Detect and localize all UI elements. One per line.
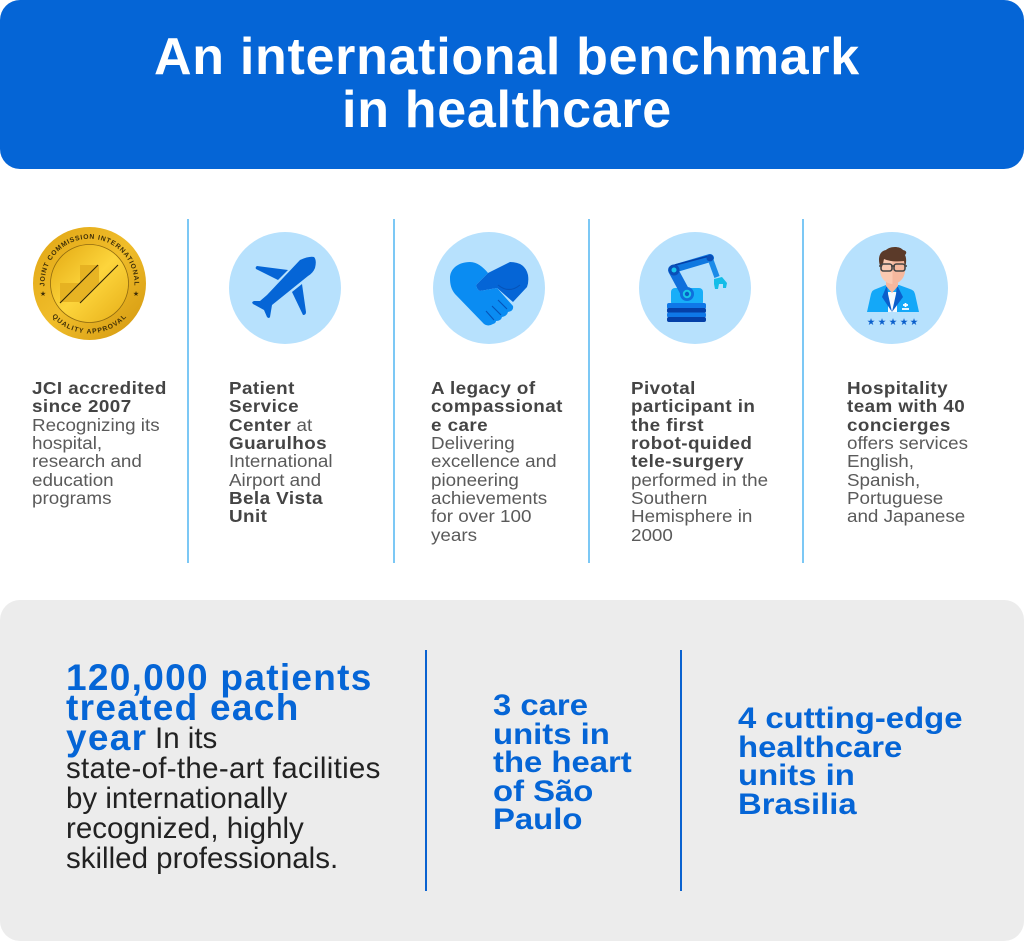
title xyxy=(154,28,860,139)
icon: concierge with stars xyxy=(836,232,948,344)
text: JCI accredited: research and xyxy=(32,451,142,471)
text: patient service center: Bela Vista xyxy=(229,488,323,508)
text: tele-surgery: performed in the xyxy=(631,470,768,490)
text: tele-surgery: Pivotal xyxy=(631,378,696,398)
text: tele-surgery: Southern xyxy=(631,488,707,508)
panel: key figures xyxy=(0,600,1024,941)
text: tele-surgery: participant in xyxy=(631,396,755,416)
text: tele-surgery: 2000 xyxy=(631,525,673,545)
stat: units in Brasilia: 4 cutting-edge xyxy=(738,702,962,735)
stat: patients treated: skilled professionals. xyxy=(66,842,338,875)
stat: care units in Sao Paulo: of São xyxy=(493,774,593,808)
text: patient service center: Center at xyxy=(229,415,312,435)
stat: patients treated: year xyxy=(66,717,147,758)
stat: patients treated: by internationally xyxy=(66,782,287,815)
text: hospitality team: team with 40 xyxy=(847,396,965,416)
icon: airplane xyxy=(229,232,341,344)
text: JCI accredited xyxy=(32,378,167,508)
stat: care units in Sao Paulo: the heart xyxy=(493,746,632,779)
text: tele-surgery: the first xyxy=(631,415,704,435)
stat: patients treated: state-of-the-art facilities xyxy=(66,752,381,785)
stat: patients treated xyxy=(66,657,381,875)
text: hospitality team: Hospitality xyxy=(847,378,948,398)
text: JCI accredited: education xyxy=(32,470,114,490)
icon: JCI gold seal xyxy=(33,227,146,340)
icon: concierge with stars: ★ xyxy=(878,317,886,328)
text: hospitality team: Portuguese xyxy=(847,488,943,508)
icon: handshake heart xyxy=(433,232,545,344)
stat: patients treated: In its xyxy=(155,722,217,755)
text: hospitality team xyxy=(847,378,968,526)
stat: care units in Sao Paulo: Paulo xyxy=(493,803,582,836)
text: JCI accredited: Recognizing its xyxy=(32,415,160,435)
stat: care units in Sao Paulo: 3 care xyxy=(493,689,588,722)
text: legacy of care xyxy=(431,378,563,545)
icon: concierge with stars: ★ xyxy=(900,317,908,328)
icon: JCI gold seal: QUALITY APPROVAL xyxy=(52,314,126,334)
text: hospitality team: English, xyxy=(847,451,914,471)
text: JCI accredited: hospital, xyxy=(32,433,102,453)
text: patient service center: Guarulhos xyxy=(229,433,327,453)
text: legacy of care: A legacy of xyxy=(431,378,536,398)
text: tele-surgery: tele-surgery xyxy=(631,451,744,471)
icon: concierge with stars: ★ xyxy=(889,317,897,328)
title: in healthcare xyxy=(342,81,672,139)
text: JCI accredited: since 2007 xyxy=(32,396,132,416)
text: hospitality team: offers services xyxy=(847,433,968,453)
text: legacy of care: compassionat xyxy=(431,396,563,416)
stat: patients treated: 120,000 patients xyxy=(66,657,373,698)
text: patient service center: Patient xyxy=(229,378,295,398)
text: legacy of care: years xyxy=(431,525,477,545)
text: patient service center: Airport and xyxy=(229,470,321,490)
header banner xyxy=(0,0,1024,169)
text: legacy of care: excellence and xyxy=(431,451,557,471)
text: tele-surgery: robot-quided xyxy=(631,433,752,453)
text: legacy of care: e care xyxy=(431,415,488,435)
stat: units in Brasilia: units in xyxy=(738,759,855,792)
stat: care units in Sao Paulo: units in xyxy=(493,718,610,750)
text: legacy of care: for over 100 xyxy=(431,506,531,526)
text: legacy of care: Delivering xyxy=(431,433,515,453)
stat: units in Brasilia: healthcare xyxy=(738,730,902,764)
text: patient service center: Unit xyxy=(229,506,267,526)
icon: JCI gold seal: ★ xyxy=(40,290,46,298)
stat: patients treated: recognized, highly xyxy=(66,812,304,845)
stat: care units in Sao Paulo xyxy=(493,689,632,836)
title: An international benchmark xyxy=(154,28,860,86)
text: patient service center xyxy=(229,378,333,526)
icon: concierge with stars: ★ xyxy=(867,317,875,328)
text: patient service center: International xyxy=(229,451,333,471)
text: hospitality team: Spanish, xyxy=(847,470,920,490)
text: JCI accredited: programs xyxy=(32,488,111,508)
stat: units in Brasilia xyxy=(738,702,962,820)
text: patient service center: Service xyxy=(229,396,299,416)
text: tele-surgery: Hemisphere in xyxy=(631,506,752,526)
icon: concierge with stars: ★ xyxy=(910,317,918,328)
icon: robotic arm xyxy=(639,232,751,344)
text: JCI accredited: JCI accredited xyxy=(32,378,167,398)
text: hospitality team: concierges xyxy=(847,415,951,435)
stat: patients treated: treated each xyxy=(66,687,300,728)
stat: units in Brasilia: Brasilia xyxy=(738,788,857,820)
text: hospitality team: and Japanese xyxy=(847,506,965,526)
icon: JCI gold seal: ★ xyxy=(133,290,139,298)
text: tele-surgery xyxy=(631,378,768,545)
text: legacy of care: achievements xyxy=(431,488,547,508)
icon: JCI gold seal: JOINT COMMISSION INTERNATIONAL xyxy=(40,234,140,286)
text: legacy of care: pioneering xyxy=(431,470,519,490)
